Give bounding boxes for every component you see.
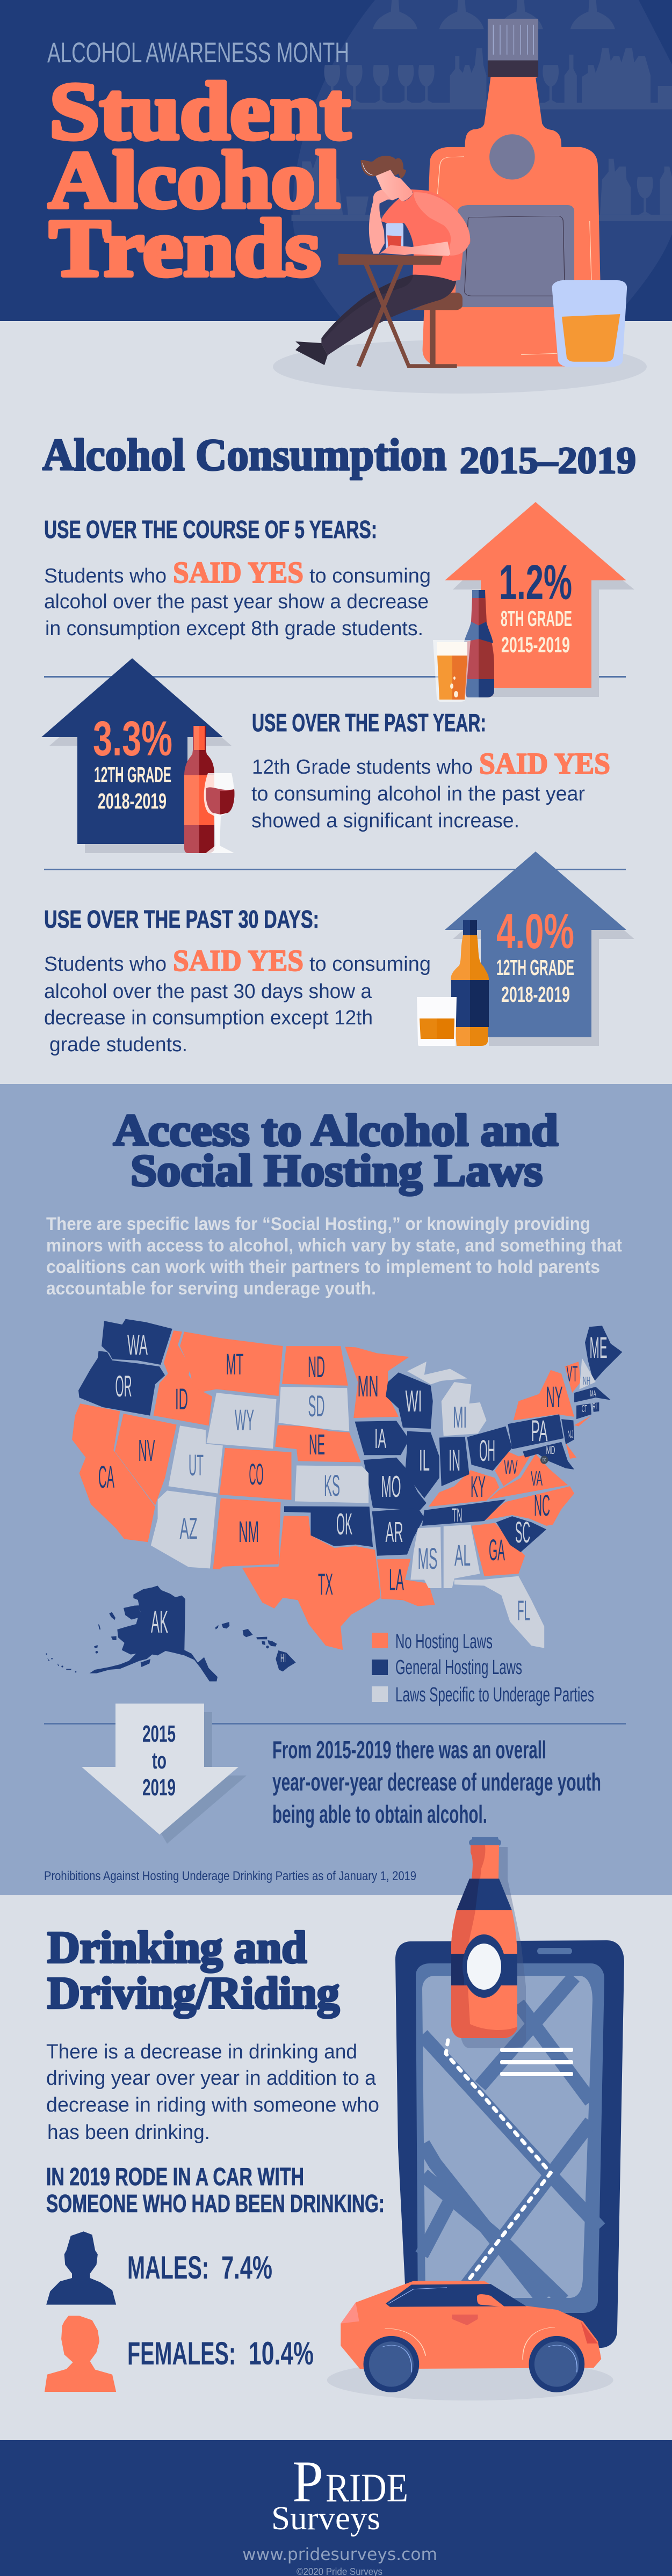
stat: males: 7.4% xyxy=(221,2250,272,2286)
text: overall decrease xyxy=(272,1736,601,1828)
state abbreviations: OR xyxy=(115,1369,132,1403)
state abbreviations: MS xyxy=(418,1541,437,1575)
paragraph: decrease in drinking and driving: decrease in riding with someone who xyxy=(46,2094,379,2116)
state abbreviations xyxy=(98,1329,607,1665)
arrow: 1.2% 8th grade: 2015-2019 xyxy=(501,632,570,657)
intro paragraph: minors with access to alcohol, which vary by state, and something that xyxy=(46,1235,622,1256)
website url: www.pridesurveys.com xyxy=(242,2545,437,2564)
text block: use over the past year: 12th Grade students who xyxy=(252,756,473,778)
text block: use over past 30 days: grade students. xyxy=(49,1034,187,1056)
icon: female silhouette xyxy=(45,2316,116,2392)
state abbreviations: OH xyxy=(479,1433,495,1467)
text block: use over past 30 days xyxy=(44,905,431,1056)
heading: access to alcohol and social hosting laws: Social Hosting Laws xyxy=(131,1146,543,1196)
text block: use over past 30 days: decrease in consumption except 12th xyxy=(44,1007,373,1029)
map legend: General Hosting Laws xyxy=(395,1656,522,1679)
text block: use over 5 years: USE OVER THE COURSE OF 5 YEARS: xyxy=(44,515,377,543)
state abbreviations: WA xyxy=(127,1329,148,1361)
text block: use over past 30 days: alcohol over the past 30 days show a xyxy=(44,980,372,1003)
state abbreviations: WV xyxy=(504,1456,518,1478)
text block: use over 5 years: Students who xyxy=(44,565,167,587)
down arrow: 2015 to 2019: 2015 xyxy=(142,1721,176,1747)
map: US states by hosting law xyxy=(46,1319,622,1682)
title xyxy=(48,66,350,293)
state abbreviations: OK xyxy=(336,1507,352,1541)
map area xyxy=(422,1976,592,2298)
state abbreviations: SC xyxy=(515,1515,530,1549)
source note: Prohibitions Against Hosting Underage Drinking Parties as of January 1, 2019 xyxy=(44,1869,416,1883)
whisky glass xyxy=(552,280,627,367)
state abbreviations: CA xyxy=(98,1460,114,1495)
state abbreviations: LA xyxy=(389,1563,404,1597)
text block: use over past 30 days: to consuming xyxy=(309,953,431,976)
subheading: in 2019 rode in a car: IN 2019 RODE IN A CAR WITH xyxy=(46,2163,304,2191)
intro paragraph: coalitions can work with their partners to implement to hold parents xyxy=(46,1257,600,1277)
icon: wine bottle and glass xyxy=(184,726,234,853)
intro paragraph: accountable for serving underage youth. xyxy=(46,1278,376,1299)
state abbreviations: GA xyxy=(489,1533,505,1567)
seated man xyxy=(295,156,470,368)
icon: beer bottle and glass xyxy=(433,590,494,702)
state abbreviations: IL xyxy=(419,1443,430,1477)
text block: use over the past year: USE OVER THE PAST YEAR: xyxy=(252,709,486,737)
state abbreviations: RI xyxy=(592,1401,597,1411)
states: laws specific to underage parties xyxy=(151,1358,596,1648)
map legend: No Hosting Laws xyxy=(395,1631,493,1653)
state abbreviations: MD xyxy=(546,1444,555,1457)
state abbreviations: MT xyxy=(226,1347,244,1381)
state abbreviations: AK xyxy=(151,1605,168,1640)
icon: whiskey bottle and glass xyxy=(417,920,489,1046)
text: overall decrease: being able to obtain alcohol. xyxy=(272,1800,487,1828)
state abbreviations: KY xyxy=(471,1469,486,1503)
divider xyxy=(44,676,626,678)
state abbreviations: ND xyxy=(308,1350,325,1384)
header panel xyxy=(0,0,672,321)
down arrow: 2015 to 2019: to xyxy=(152,1748,167,1774)
state abbreviations: MN xyxy=(358,1369,378,1403)
illustration: man at table beside giant bottle xyxy=(273,19,647,394)
state abbreviations: KS xyxy=(324,1468,340,1502)
state abbreviations: TX xyxy=(318,1567,333,1602)
bar shelves backdrop xyxy=(292,0,672,221)
heading: Alcohol Consumption 2015–2019: 2015–2019 xyxy=(460,440,636,482)
stat: females: 10.4% xyxy=(249,2335,314,2371)
state abbreviations: IA xyxy=(374,1423,386,1454)
logo: Pride Surveys xyxy=(271,2449,408,2537)
stat: females: FEMALES: xyxy=(127,2335,236,2371)
heading: access to alcohol and social hosting laws: Access to Alcohol and xyxy=(113,1105,558,1155)
text block: use over the past year: SAID YES xyxy=(479,747,610,781)
heading: Alcohol Consumption 2015–2019: Alcohol Consumption xyxy=(42,430,446,480)
logo: Pride Surveys: P xyxy=(292,2449,323,2514)
state abbreviations: NM xyxy=(239,1515,259,1548)
icon: male silhouette xyxy=(46,2231,116,2305)
down arrow: 2015 to 2019: 2019 xyxy=(142,1774,176,1801)
bottle xyxy=(469,1839,501,1846)
arrow: 3.3% 12th grade: 12TH GRADE xyxy=(94,762,171,787)
bottle shadow xyxy=(460,1847,526,2048)
arrow: 1.2% 8th grade xyxy=(445,502,634,697)
text block: use over past 30 days: Students who xyxy=(44,953,167,976)
panel: access to alcohol xyxy=(0,1084,672,1895)
state abbreviations: IN xyxy=(449,1443,460,1477)
state abbreviations: MI xyxy=(453,1400,467,1435)
map: US states by hosting law: ME xyxy=(590,1330,607,1364)
title: Student xyxy=(49,66,350,156)
paragraph: decrease in drinking and driving: has been drinking. xyxy=(47,2121,210,2144)
heading: access to alcohol and social hosting laws xyxy=(113,1105,558,1196)
heading: Alcohol Consumption 2015–2019 xyxy=(42,430,636,482)
state abbreviations: CO xyxy=(249,1457,263,1491)
paragraph: decrease in drinking and driving xyxy=(46,2041,379,2144)
intro paragraph: There are specific laws for “Social Hosting,” or knowingly providing xyxy=(46,1214,590,1234)
divider xyxy=(44,869,626,870)
Alaska and Hawaii xyxy=(46,1585,296,1682)
text block: use over 5 years: SAID YES xyxy=(173,556,304,590)
text block: use over the past year xyxy=(251,709,610,832)
arrow: 4.0% 12th grade: 4.0% xyxy=(496,904,574,959)
state abbreviations: MO xyxy=(381,1469,401,1504)
state abbreviations: NY xyxy=(546,1380,563,1414)
arrow: 3.3% 12th grade: 3.3% xyxy=(93,711,172,766)
footer panel xyxy=(0,2440,672,2576)
subheading: in 2019 rode in a car: SOMEONE WHO HAD BEEN DRINKING: xyxy=(46,2189,385,2217)
arrow: 1.2% 8th grade: 1.2% xyxy=(499,555,572,610)
text block: use over the past year: showed a significant increase. xyxy=(251,810,519,832)
text block: use over the past year: to consuming alcohol in the past year xyxy=(251,783,585,805)
arrow: 1.2% 8th grade: 8TH GRADE xyxy=(501,606,572,631)
giant bottle xyxy=(423,19,602,366)
heading: drinking and driving/riding: Drinking and xyxy=(47,1923,307,1973)
illustration: car xyxy=(327,2281,613,2400)
state abbreviations: NE xyxy=(309,1429,325,1461)
heading: drinking and driving/riding xyxy=(47,1923,339,2018)
arrow: 4.0% 12th grade: 2018-2019 xyxy=(501,982,570,1007)
state abbreviations: WI xyxy=(405,1384,422,1418)
state abbreviations: ID xyxy=(175,1382,188,1416)
intro paragraph xyxy=(46,1214,622,1299)
phone body xyxy=(395,1940,624,2348)
down arrow: 2015 to 2019 xyxy=(82,1704,247,1844)
title: Trends xyxy=(49,203,321,293)
text block: use over past 30 days: SAID YES xyxy=(173,944,304,978)
state abbreviations: VA xyxy=(531,1467,543,1490)
arrow: 3.3% 12th grade xyxy=(41,658,232,853)
arrow: 4.0% 12th grade: 12TH GRADE xyxy=(496,955,574,980)
text block: use over past 30 days: USE OVER THE PAST 30 DAYS: xyxy=(44,905,319,933)
states: no hosting laws xyxy=(72,1330,591,1650)
map legend xyxy=(372,1631,594,1706)
state abbreviations: NH xyxy=(583,1375,590,1387)
state abbreviations: NV xyxy=(139,1433,155,1468)
map roads xyxy=(422,1977,600,2301)
arrow: 4.0% 12th grade xyxy=(445,852,634,1046)
text block: use over 5 years xyxy=(44,515,431,640)
text block: use over 5 years: alcohol over the past year show a decrease xyxy=(44,591,429,613)
state abbreviations: DC xyxy=(543,1457,546,1462)
state abbreviations: AZ xyxy=(179,1511,198,1546)
state abbreviations: UT xyxy=(189,1448,204,1482)
divider xyxy=(44,1723,626,1724)
text block: use over 5 years: in consumption except 8th grade students. xyxy=(45,617,423,640)
paragraph: decrease in drinking and driving: driving year over year in addition to a xyxy=(46,2067,377,2090)
state abbreviations: TN xyxy=(452,1505,462,1526)
paragraph: decrease in drinking and driving: There is a decrease in drinking and xyxy=(46,2041,357,2063)
state abbreviations: WY xyxy=(235,1403,254,1437)
eyebrow: Alcohol Awareness Month: ALCOHOL AWARENESS MONTH xyxy=(47,37,349,69)
state abbreviations: NJ xyxy=(567,1429,574,1440)
stat: males: MALES: xyxy=(127,2250,209,2286)
logo: Pride Surveys: RIDE xyxy=(326,2466,408,2510)
state abbreviations: AR xyxy=(386,1516,403,1548)
state abbreviations: CT xyxy=(582,1403,587,1414)
ground shadow xyxy=(273,340,647,394)
state abbreviations: SD xyxy=(308,1389,324,1423)
arrow: 3.3% 12th grade: 2018-2019 xyxy=(98,789,167,813)
logo: Pride Surveys: Surveys xyxy=(271,2500,380,2537)
title: Alcohol xyxy=(48,135,340,225)
state abbreviations: AL xyxy=(454,1538,471,1572)
state abbreviations: FL xyxy=(517,1595,530,1627)
state abbreviations: MA xyxy=(590,1388,596,1399)
state abbreviations: NC xyxy=(534,1488,550,1522)
illustration: phone with map and bottle xyxy=(395,1837,624,2348)
state abbreviations: PA xyxy=(531,1414,548,1447)
state abbreviations: VT xyxy=(566,1361,578,1386)
text block: use over 5 years: to consuming xyxy=(309,565,431,587)
subheading: in 2019 rode in a car xyxy=(46,2163,385,2217)
states: general hosting laws xyxy=(78,1319,622,1556)
state abbreviations: HI xyxy=(280,1651,286,1665)
heading: drinking and driving/riding: Driving/Riding xyxy=(47,1968,339,2018)
